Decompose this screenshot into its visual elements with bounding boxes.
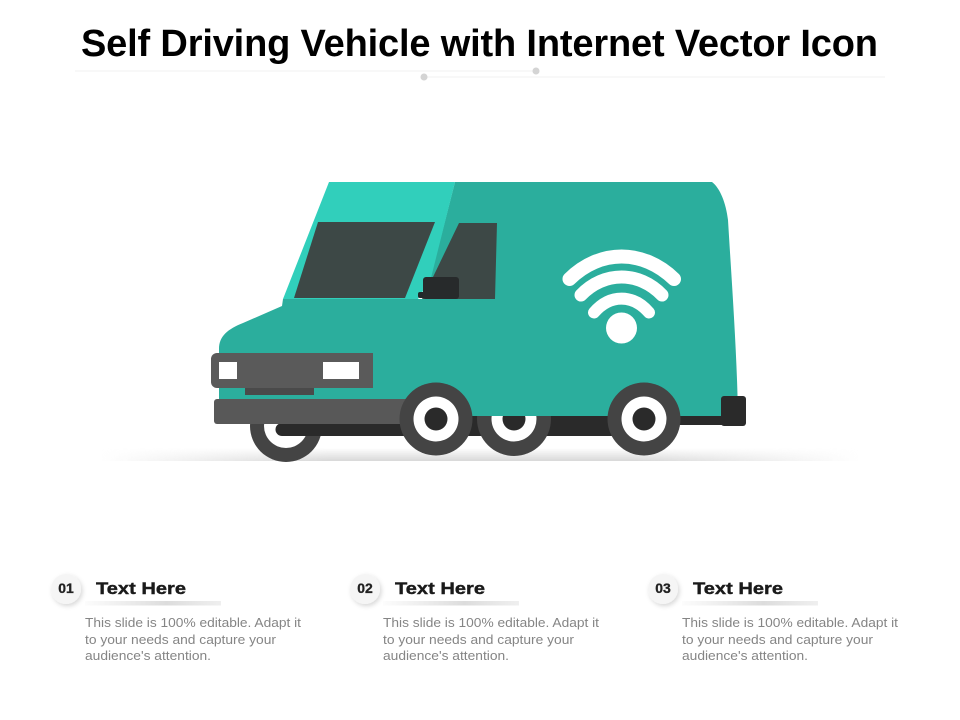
under grille bbox=[245, 388, 314, 395]
van illustration bbox=[211, 182, 746, 462]
item 02 bbox=[350, 574, 600, 663]
item 01: This slide is 100% editable. Adapt it bbox=[85, 616, 302, 630]
item 01: Text Here bbox=[96, 579, 186, 598]
item 02: 02 bbox=[357, 580, 373, 596]
item 01: to your needs and capture your bbox=[85, 633, 276, 647]
item 03 bbox=[648, 574, 899, 663]
title divider bbox=[75, 68, 885, 80]
item 02: to your needs and capture your bbox=[383, 633, 574, 647]
grille bbox=[211, 353, 373, 388]
item 03: to your needs and capture your bbox=[682, 633, 873, 647]
front wheel bbox=[400, 382, 472, 456]
front left wheel bbox=[250, 390, 322, 462]
windshield bbox=[294, 222, 435, 298]
icon: wifi bbox=[570, 256, 674, 344]
item 03: 03 bbox=[655, 580, 671, 596]
cab upper panel bbox=[283, 182, 455, 299]
item 03: audience's attention. bbox=[682, 649, 808, 663]
front bumper bbox=[214, 399, 414, 424]
item 01: audience's attention. bbox=[85, 649, 211, 663]
item 03: Text Here bbox=[693, 579, 783, 598]
side window bbox=[422, 223, 497, 299]
title: Self Driving Vehicle with Internet Vector Icon bbox=[81, 23, 878, 65]
item 02: audience's attention. bbox=[383, 649, 509, 663]
item 02: Text Here bbox=[395, 579, 485, 598]
headlight left bbox=[219, 362, 237, 379]
item 02: This slide is 100% editable. Adapt it bbox=[383, 616, 600, 630]
van body bbox=[219, 182, 738, 416]
rear bumper bbox=[721, 396, 746, 426]
item 01: 01 bbox=[58, 580, 74, 596]
headlight right bbox=[323, 362, 359, 379]
chassis bbox=[276, 416, 725, 436]
ground shadow bbox=[147, 450, 812, 461]
item 01 bbox=[51, 574, 302, 663]
item 03: This slide is 100% editable. Adapt it bbox=[682, 616, 899, 630]
rear wheel bbox=[608, 382, 680, 456]
rear inner wheel bbox=[477, 382, 551, 456]
side mirror bbox=[418, 277, 459, 299]
